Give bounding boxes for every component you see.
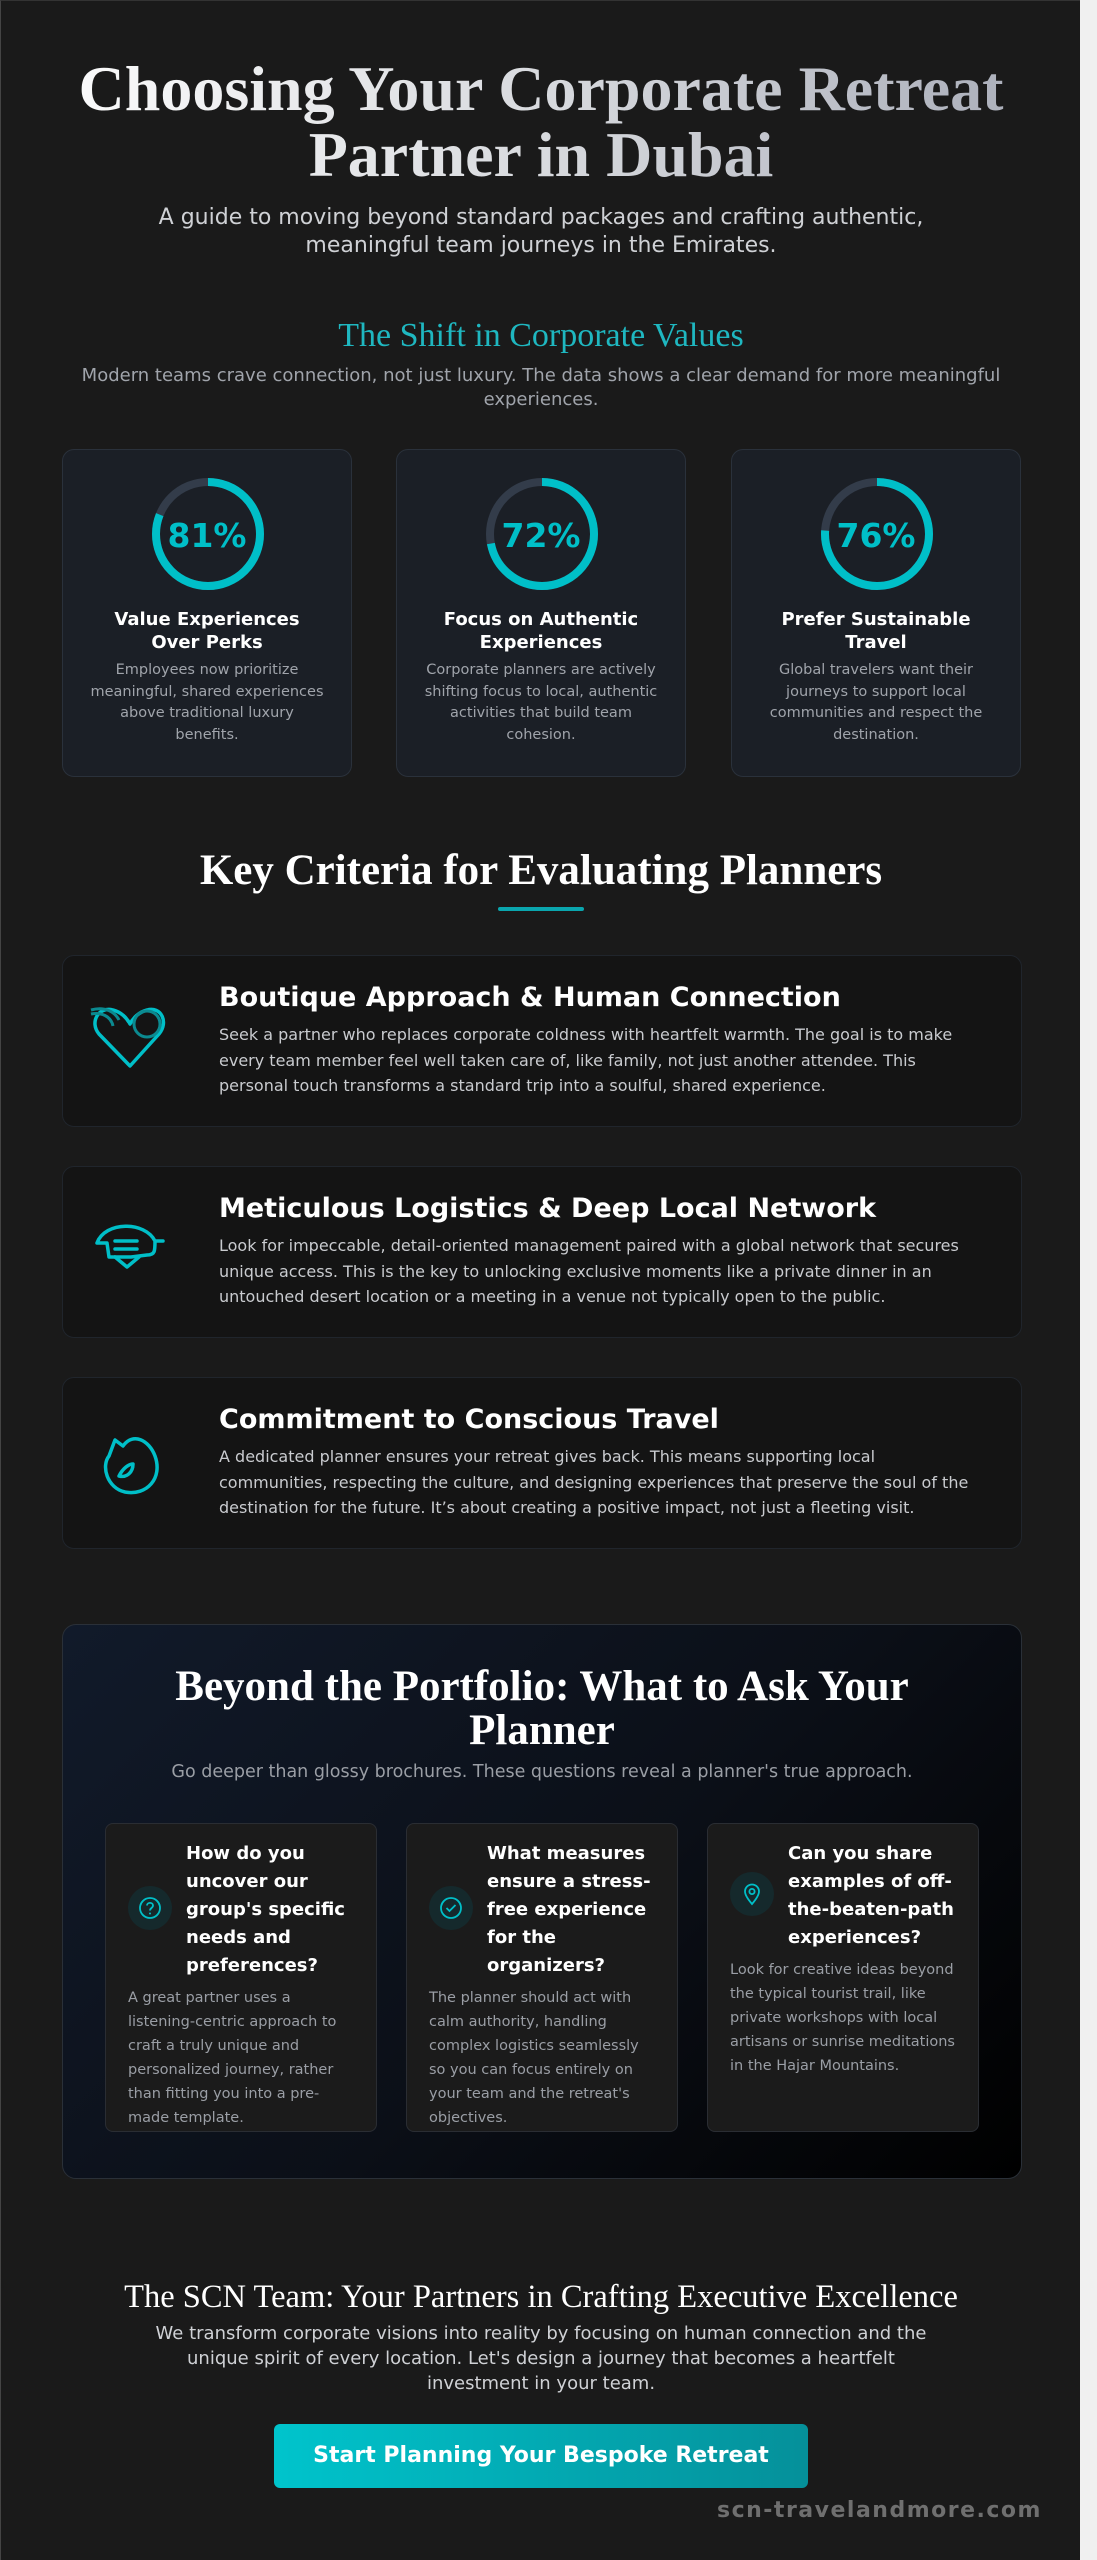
question card 2: The planner should act with calm authority, handling complex logistics seamlessly so you can focus entirely on your team and the retreat's objectives.: [429, 1990, 639, 2126]
icon: logistics: [95, 1224, 165, 1269]
title: [1, 56, 1081, 188]
question card 1: How do you uncover our group's specific needs and preferences?: [186, 1843, 345, 1976]
question card 3: Look for creative ideas beyond the typical tourist trail, like private workshops with local artisans or sunrise meditations in the Hajar Mountains.: [730, 1962, 955, 2074]
icon: heart: [90, 1007, 166, 1068]
criteria card 2: Meticulous Logistics & Deep Local Network: [219, 1193, 876, 1224]
question card 2: What measures ensure a stress-free experience for the organizers?: [487, 1843, 651, 1976]
stat card 2: shifting focus to local, authentic: [425, 684, 657, 700]
stat card 3: destination.: [833, 726, 919, 742]
subtitle: meaningful team journeys in the Emirates.: [305, 233, 777, 258]
criteria card 3: A dedicated planner ensures your retreat gives back. This means supporting local communities, respecting the culture, and designing experiences that preserve the soul of the destination for the future. It’s about creating a positive impact, not just a fleeting visit.: [219, 1447, 968, 1517]
stat card 3: 76%: [836, 516, 916, 555]
icon: map pin: [730, 1872, 774, 1916]
question card 1: A great partner uses a listening-centric approach to craft a truly unique and personalized journey, rather than fitting you into a pre-made template.: [128, 1990, 336, 2126]
criteria card 2: [62, 1166, 1022, 1338]
question card 1: [105, 1823, 377, 2132]
panel heading: Planner: [469, 1707, 615, 1754]
stat card 3: communities and respect the: [770, 705, 982, 721]
stat card 2: Focus on Authentic: [444, 609, 638, 630]
panel subtitle: Go deeper than glossy brochures. These questions reveal a planner's true approach.: [171, 1762, 913, 1782]
stat card 1: benefits.: [175, 726, 239, 742]
criteria card 3: [62, 1377, 1022, 1549]
stat card 2: activities that build team: [450, 705, 632, 721]
stat card 2: [396, 449, 686, 777]
stat card 1: Value Experiences: [114, 609, 300, 630]
heading: SCN team: The SCN Team: Your Partners in Crafting Executive Excellence: [124, 2279, 958, 2315]
subtitle: A guide to moving beyond standard packages and crafting authentic,: [159, 205, 923, 230]
stat card 2: Corporate planners are actively: [426, 662, 656, 678]
title: Choosing Your Corporate Retreat: [79, 53, 1003, 124]
stat card 2: cohesion.: [506, 726, 576, 742]
donut chart 72%: [486, 478, 598, 590]
stat card 1: above traditional luxury: [120, 705, 294, 721]
criteria card 3: Commitment to Conscious Travel: [219, 1404, 719, 1435]
criteria card 1: [62, 955, 1022, 1127]
criteria card 1: Seek a partner who replaces corporate coldness with heartfelt warmth. The goal is to make every team member feel well taken care of, like family, not just another attendee. This personal touch transforms a standard trip into a soulful, shared experience.: [219, 1025, 952, 1095]
donut chart 76%: [821, 478, 933, 590]
stat card 1: Employees now prioritize: [116, 662, 298, 678]
button: CTA: Start Planning Your Bespoke Retreat: [313, 2443, 769, 2468]
donut chart 81%: [152, 478, 264, 590]
criteria card 2: Look for impeccable, detail-oriented management paired with a global network that secures unique access. This is the key to unlocking exclusive moments like a private dinner in an untouched desert location or a meeting in a venue not typically open to the public.: [219, 1236, 959, 1306]
icon: check: [429, 1886, 473, 1930]
heading: shift in corporate values: The Shift in Corporate Values: [338, 317, 744, 354]
question card 2: [406, 1823, 678, 2132]
panel heading: [175, 1663, 909, 1754]
title: Partner in Dubai: [309, 119, 773, 190]
stat card 1: 81%: [168, 516, 246, 555]
stat card 1: Over Perks: [151, 632, 263, 653]
footer: website: scn-travelandmore.com: [717, 2498, 1042, 2523]
stat card 3: Global travelers want their: [779, 662, 973, 678]
stat card 3: [731, 449, 1021, 777]
underline accent: [498, 907, 584, 911]
question card 3: Can you share examples of off-the-beaten-path experiences?: [788, 1843, 954, 1948]
panel heading: Beyond the Portfolio: What to Ask Your: [175, 1663, 909, 1710]
stat card 3: journeys to support local: [786, 684, 966, 700]
criteria card 1: Boutique Approach & Human Connection: [219, 982, 841, 1013]
subtitle: [158, 205, 923, 258]
heading: key criteria: Key Criteria for Evaluating Planners: [200, 847, 882, 894]
stat card 2: 72%: [502, 516, 580, 555]
icon: question: [128, 1886, 172, 1930]
button: CTA: [274, 2424, 808, 2488]
stat card 2: Experiences: [480, 632, 602, 653]
question card 3: [707, 1823, 979, 2132]
stat card 3: Travel: [845, 632, 907, 653]
stat card 1: meaningful, shared experiences: [90, 684, 324, 700]
panel: beyond the portfolio: [62, 1624, 1022, 2179]
stat card 1: [62, 449, 352, 777]
text: shift intro: Modern teams crave connection, not just luxury. The data shows a clear demand for more meaningful experiences.: [82, 365, 1000, 410]
stat card 3: Prefer Sustainable: [781, 609, 971, 630]
icon: conscious travel leaf: [104, 1437, 159, 1494]
text: SCN pitch: We transform corporate visions into reality by focusing on human connection and the unique spirit of every location. Let's design a journey that becomes a heartfelt investment in your team.: [156, 2323, 926, 2394]
